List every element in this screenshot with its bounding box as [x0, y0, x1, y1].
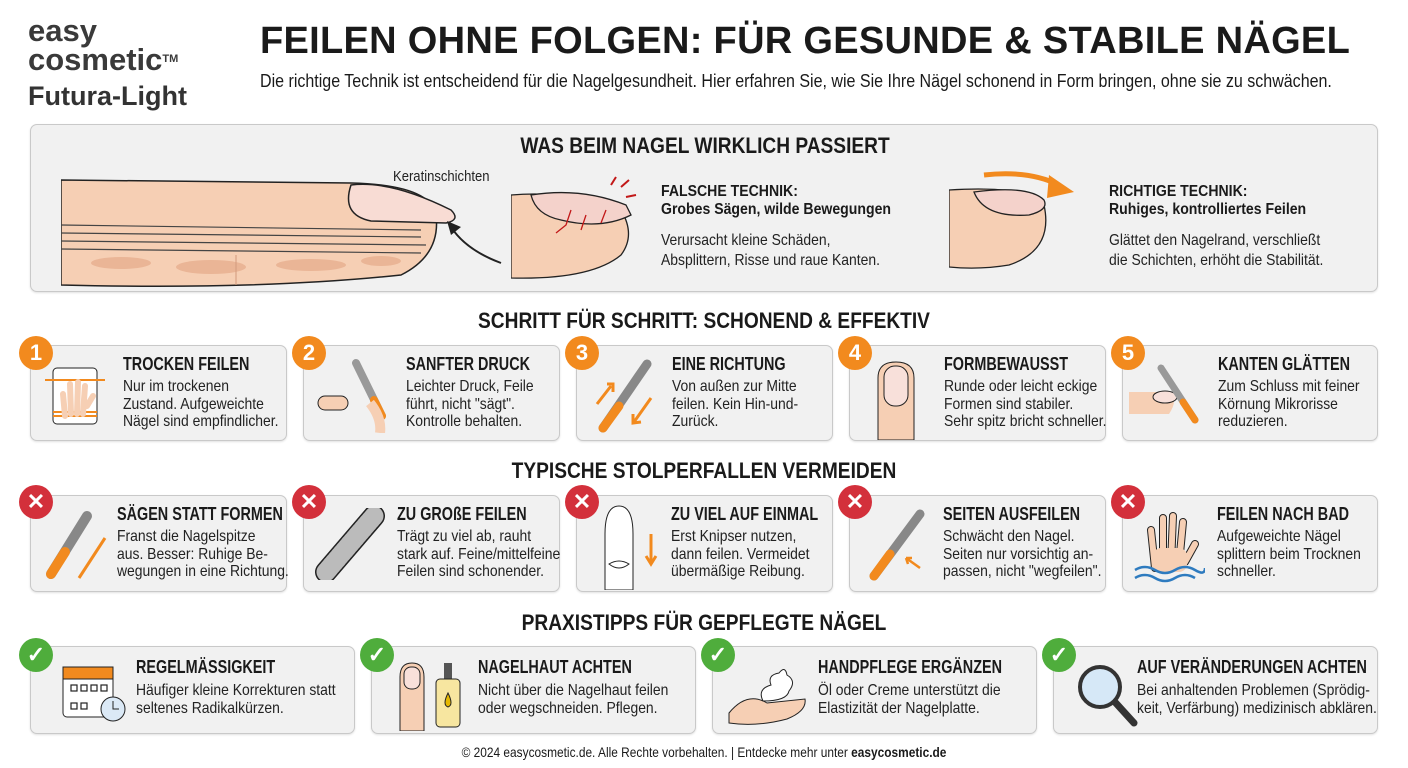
mistake 1: SÄGEN STATT FORMEN [117, 504, 283, 524]
icon: file with finger [318, 359, 386, 433]
logo: cosmeticTM [28, 42, 178, 77]
title: FEILEN OHNE FOLGEN: FÜR GESUNDE & STABILE NÄGEL [260, 20, 1350, 62]
logo: Futura-Light [28, 81, 187, 111]
badge x: ✕ [1119, 489, 1137, 514]
step 4: Sehr spitz bricht schneller. [944, 413, 1106, 430]
badge check: ✓ [1050, 642, 1068, 667]
mistake 4 [849, 495, 1106, 592]
mistake 3: dann feilen. Vermeidet [671, 546, 810, 562]
icon: finger with file [1129, 364, 1198, 424]
text: falsche technik: Grobes Sägen, wilde Bewegungen [661, 201, 891, 218]
badge 5: 5 [1122, 340, 1134, 365]
label: Keratinschichten: Keratinschichten [393, 168, 489, 185]
step 5 [1122, 345, 1378, 441]
mistake 4: Seiten nur vorsichtig an- [943, 546, 1093, 562]
tip 3 [712, 646, 1037, 734]
step 1: Nur im trockenen [123, 378, 229, 395]
tip 1: REGELMÄSSIGKEIT [136, 657, 275, 677]
panel: was beim nagel passiert: die Schichten, erhöht die Stabilität. [1109, 252, 1323, 269]
step 4: FORMBEWAUSST [944, 354, 1068, 374]
step 2: Kontrolle behalten. [406, 413, 522, 430]
icon: file side [870, 510, 924, 580]
text: richtige technik [1109, 183, 1306, 218]
icon: hand in water [1134, 512, 1205, 582]
badge check: ✓ [27, 642, 45, 667]
text: richtige technik: Ruhiges, kontrolliertes Feilen [1109, 201, 1306, 218]
step 3: feilen. Kein Hin-und- [672, 396, 798, 412]
icon: file with arrows [596, 360, 652, 432]
mistake 5: splittern beim Trocknen [1217, 546, 1361, 562]
icon: calendar [62, 666, 126, 722]
step 5: Zum Schluss mit feiner [1218, 378, 1360, 395]
panel: was beim nagel passiert: Verursacht kleine Schäden, [661, 232, 830, 249]
icon: long nail [604, 506, 658, 590]
mistake 1: Franst die Nagelspitze [117, 528, 255, 545]
step 3 [576, 345, 833, 441]
icon: hand with cream [728, 669, 806, 725]
tip 1: seltenes Radikalkürzen. [136, 700, 284, 716]
subtitle: Die richtige Technik ist entscheidend für die Nagelgesundheit. Hier erfahren Sie, wie Sie Ihre Nägel schonend in Form bringen, ohne sie zu schwächen. [260, 71, 1332, 91]
text: falsche technik [661, 183, 891, 218]
mistake 4: passen, nicht "wegfeilen". [943, 563, 1101, 580]
heading: schritt für schritt: SCHRITT FÜR SCHRITT: SCHONEND & EFFEKTIV [478, 308, 930, 333]
text: richtige technik: RICHTIGE TECHNIK: [1109, 183, 1247, 200]
tip 3: Elastizität der Nagelplatte. [818, 700, 980, 716]
badge x: ✕ [300, 489, 318, 514]
mistake 2: ZU GROßE FEILEN [397, 504, 527, 524]
panel: was beim nagel passiert: Glättet den Nagelrand, verschließt [1109, 232, 1320, 249]
badge 3 [565, 336, 599, 370]
illustration: finger cross-section [61, 179, 502, 287]
step 5: reduzieren. [1218, 413, 1288, 430]
mistake 5: Aufgeweichte Nägel [1217, 528, 1341, 545]
step 4: Runde oder leicht eckige [944, 378, 1097, 395]
step 5: KANTEN GLÄTTEN [1218, 354, 1350, 374]
logo: easy [28, 13, 97, 48]
illustration: damaged nail [511, 176, 636, 279]
mistake 2 [303, 495, 560, 592]
tip 4 [1053, 646, 1378, 734]
icon: file double arrow [46, 511, 106, 579]
badge 2: 2 [303, 340, 315, 365]
badge 4 [838, 336, 872, 370]
logo [28, 13, 187, 111]
panel: was beim nagel passiert [30, 124, 1378, 292]
badge x [1111, 485, 1145, 519]
badge x: ✕ [27, 489, 45, 514]
badge check: ✓ [709, 642, 727, 667]
step 3: EINE RICHTUNG [672, 354, 786, 374]
tip 4: keit, Verfärbung) medizinisch abklären. [1137, 700, 1377, 716]
badge check: ✓ [368, 642, 386, 667]
badge 1: 1 [30, 340, 42, 365]
badge check [360, 638, 394, 672]
panel: was beim nagel passiert: Absplittern, Risse und raue Kanten. [661, 252, 880, 269]
step 1: TROCKEN FEILEN [123, 354, 249, 374]
mistake 3: ZU VIEL AUF EINMAL [671, 504, 818, 524]
step 3: Von außen zur Mitte [672, 378, 797, 395]
illustration: correct nail with arrow [949, 171, 1074, 269]
step 4 [849, 345, 1106, 441]
mistake 3: übermäßige Reibung. [671, 563, 805, 580]
tip 4: Bei anhaltenden Problemen (Sprödig- [1137, 682, 1370, 699]
step 1 [30, 345, 287, 441]
badge 1 [19, 336, 53, 370]
mistake 1: wegungen in eine Richtung. [117, 563, 289, 580]
badge x [838, 485, 872, 519]
tip 4: AUF VERÄNDERUNGEN ACHTEN [1137, 657, 1367, 677]
badge 3: 3 [576, 340, 588, 365]
mistake 2: Trägt zu viel ab, rauht [397, 528, 531, 545]
icon: magnifier [1078, 665, 1138, 726]
step 1: Zustand. Aufgeweichte [123, 396, 264, 412]
icon: finger + oil [400, 662, 460, 731]
icon: finger nail [878, 362, 914, 440]
heading: WAS BEIM NAGEL WIRKLICH PASSIERT [520, 133, 890, 158]
badge x [19, 485, 53, 519]
mistake 3: Erst Knipser nutzen, [671, 528, 796, 545]
icon: big file [315, 508, 385, 580]
badge check [701, 638, 735, 672]
badge x: ✕ [573, 489, 591, 514]
mistake 4: SEITEN AUSFEILEN [943, 504, 1080, 524]
step 5: Körnung Mikrorisse [1218, 396, 1338, 412]
mistake 3 [576, 495, 833, 592]
badge x: ✕ [846, 489, 864, 514]
tip 3: HANDPFLEGE ERGÄNZEN [818, 657, 1002, 677]
badge x [565, 485, 599, 519]
mistake 5: schneller. [1217, 563, 1276, 580]
badge 5 [1111, 336, 1145, 370]
badge check [19, 638, 53, 672]
icon: towel hand [45, 368, 105, 424]
mistake 5: FEILEN NACH BAD [1217, 504, 1349, 524]
badge 4: 4 [849, 340, 861, 365]
mistake 1: aus. Besser: Ruhige Be- [117, 546, 268, 562]
step 2 [303, 345, 560, 441]
text: falsche technik: FALSCHE TECHNIK: [661, 183, 798, 200]
step 1: Nägel sind empfindlicher. [123, 413, 279, 430]
badge 2 [292, 336, 326, 370]
badge check [1042, 638, 1076, 672]
tip 2 [371, 646, 696, 734]
mistake 2: stark auf. Feine/mittelfeine [397, 546, 560, 562]
step 2: SANFTER DRUCK [406, 354, 530, 374]
step 2: Leichter Druck, Feile [406, 378, 534, 395]
tip 1 [30, 646, 355, 734]
heading: stolperfallen: TYPISCHE STOLPERFALLEN VERMEIDEN [512, 458, 896, 483]
footer: © 2024 easycosmetic.de. Alle Rechte vorbehalten. | Entdecke mehr unter easycosmetic.de [462, 744, 946, 760]
step 2: führt, nicht "sägt". [406, 396, 515, 412]
tip 2: oder wegschneiden. Pflegen. [478, 700, 658, 716]
mistake 5 [1122, 495, 1378, 592]
tip 3: Öl oder Creme unterstützt die [818, 682, 1001, 699]
mistake 2: Feilen sind schonender. [397, 563, 544, 580]
tip 2: NAGELHAUT ACHTEN [478, 657, 632, 677]
mistake 1 [30, 495, 287, 592]
step 3: Zurück. [672, 413, 718, 430]
mistake 4: Schwächt den Nagel. [943, 528, 1075, 545]
tip 1: Häufiger kleine Korrekturen statt [136, 682, 336, 699]
heading: praxistipps: PRAXISTIPPS FÜR GEPFLEGTE NÄGEL [522, 610, 886, 635]
tip 2: Nicht über die Nagelhaut feilen [478, 682, 668, 699]
step 4: Formen sind stabiler. [944, 396, 1073, 412]
badge x [292, 485, 326, 519]
